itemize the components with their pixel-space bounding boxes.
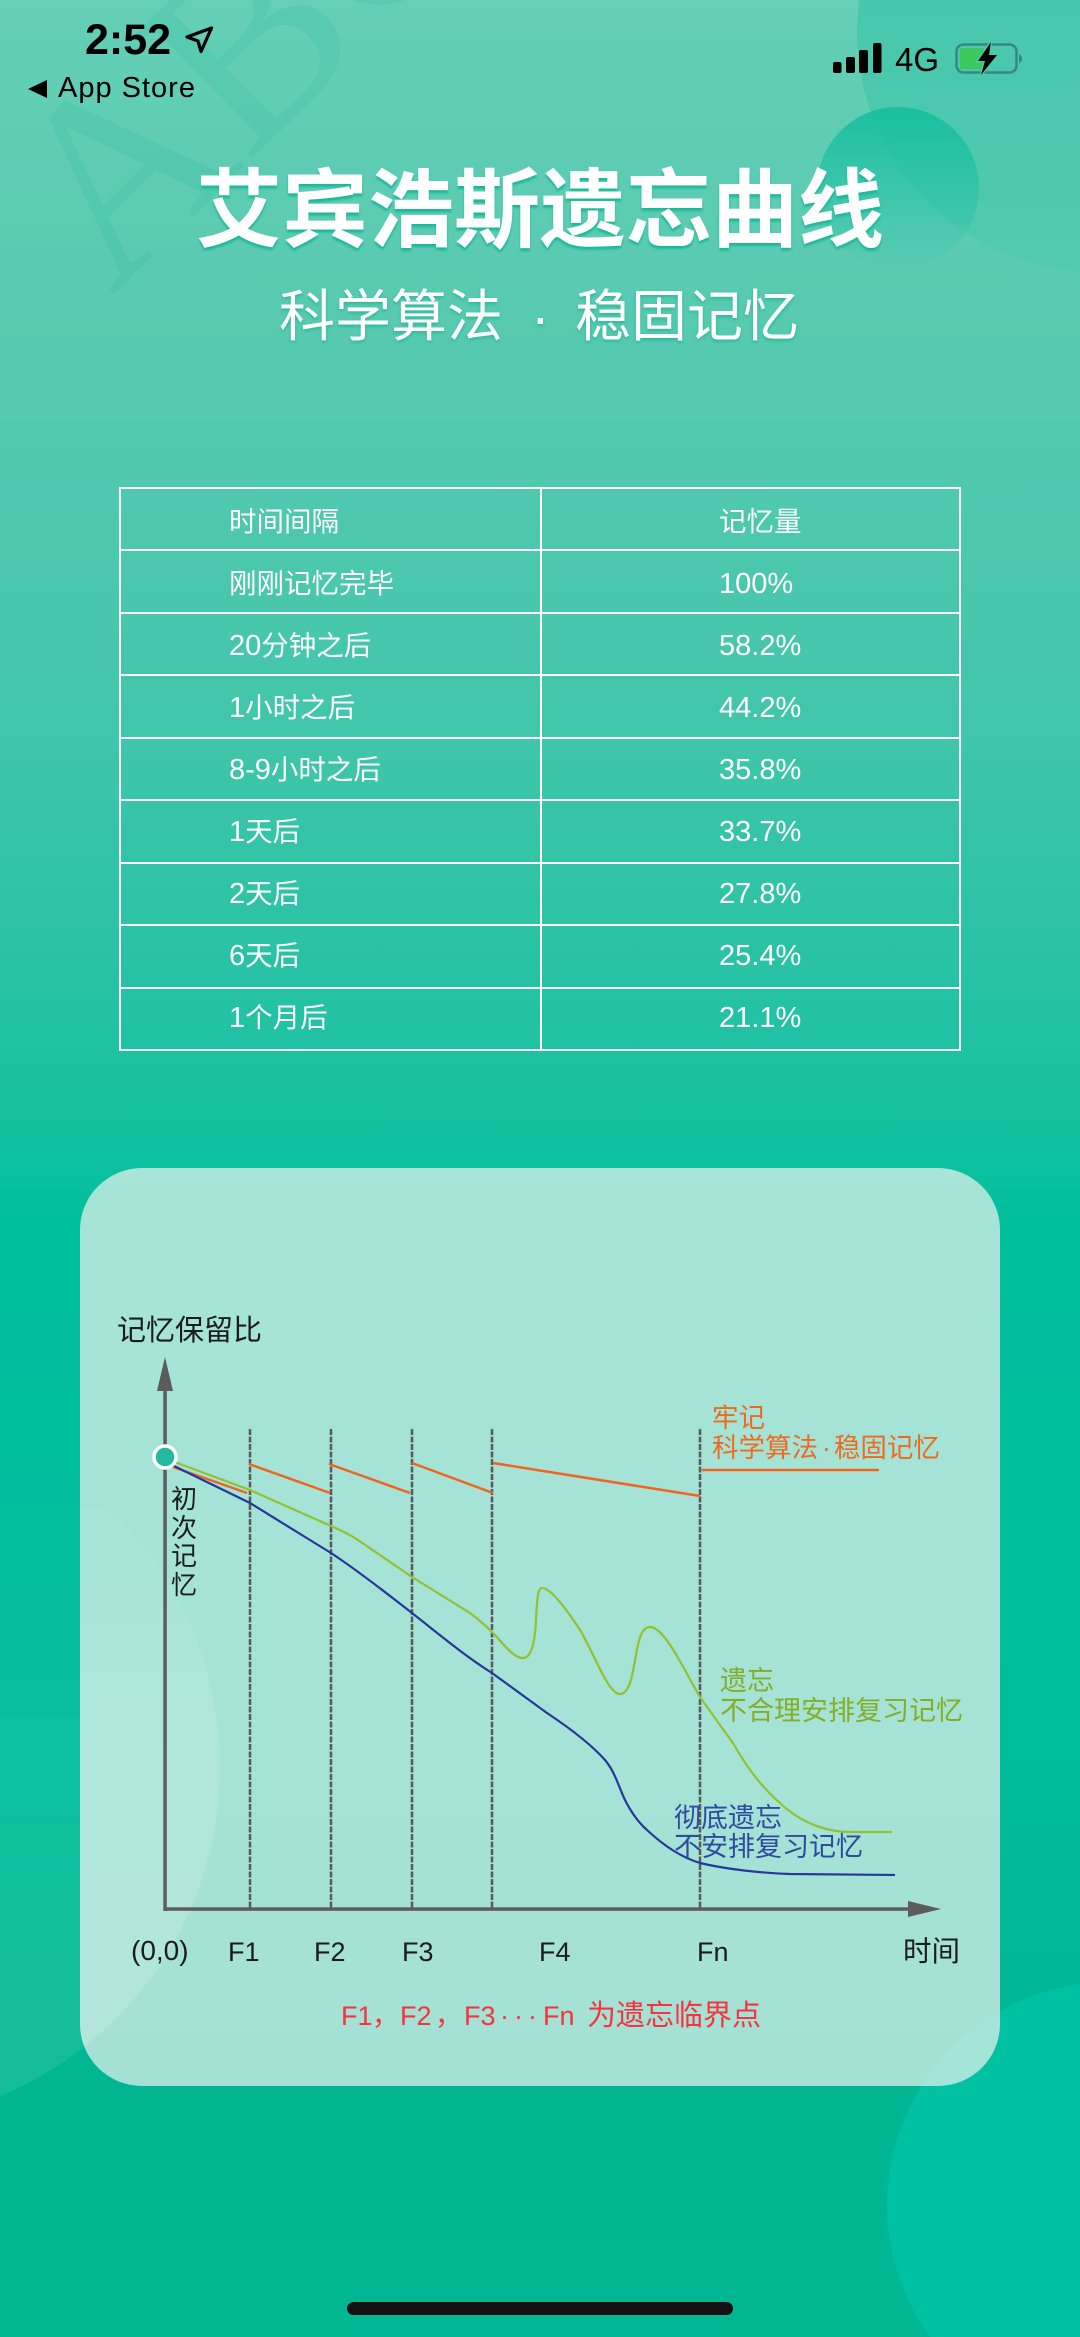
critical points note: F3 — [464, 2001, 496, 2031]
status bar: time: 2:52 — [85, 16, 171, 64]
critical point lines — [250, 1429, 700, 1909]
icon: signal bars — [833, 43, 882, 73]
icon: location arrow — [185, 26, 214, 54]
critical points note: ··· — [500, 2001, 542, 2031]
complete forgetting label — [674, 1803, 863, 1862]
critical points note: F2 — [400, 2001, 432, 2031]
initial memory label — [171, 1484, 197, 1600]
row 6 time: 2天后 — [229, 878, 300, 910]
x axis labels: (0,0) — [131, 1935, 189, 1966]
icon: charging battery — [955, 42, 1022, 75]
firm memory label: 牢记 — [712, 1403, 765, 1433]
table header: time interval: 时间间隔 — [229, 506, 339, 537]
row 4 time: 8-9小时之后 — [229, 754, 381, 786]
orange curve: firm memory — [173, 1463, 879, 1496]
critical points note: Fn — [543, 2001, 575, 2031]
blue curve: no review — [172, 1465, 895, 1875]
subtitle: 稳固记忆 — [575, 285, 799, 348]
initial memory label: 忆 — [171, 1570, 197, 1600]
x axis labels: F4 — [539, 1937, 571, 1967]
row 1 value: 100% — [719, 568, 793, 600]
firm memory label: 科学算法·稳固记忆 — [712, 1433, 940, 1463]
subtitle — [279, 285, 799, 348]
row 1 time: 刚刚记忆完毕 — [229, 568, 394, 599]
complete forgetting label: 彻底遗忘 — [674, 1803, 782, 1833]
table header: memory amount: 记忆量 — [719, 506, 802, 537]
critical points note: F1 — [341, 2001, 373, 2031]
firm memory label — [712, 1403, 940, 1463]
critical points note: ， — [435, 2001, 462, 2031]
forget label: 遗忘 — [720, 1666, 774, 1696]
row 6 value: 27.8% — [719, 878, 801, 910]
initial memory label: 记 — [171, 1541, 197, 1571]
row 7 value: 25.4% — [719, 940, 801, 972]
status bar: back to App Store: App Store — [58, 72, 196, 104]
row 3 value: 44.2% — [719, 692, 801, 724]
start point marker — [154, 1446, 176, 1468]
x axis arrow — [164, 1901, 941, 1917]
panel: retention table — [119, 487, 961, 1051]
critical points note: ， — [372, 2001, 399, 2031]
subtitle: · — [531, 285, 550, 348]
panel: forgetting curve card — [80, 1168, 1000, 2086]
initial memory label: 次 — [171, 1513, 197, 1543]
row 2 time: 20分钟之后 — [229, 630, 371, 662]
status bar: network type: 4G — [895, 41, 939, 78]
x axis labels: F1 — [228, 1937, 260, 1967]
row 8 time: 1个月后 — [229, 1002, 328, 1034]
row 2 value: 58.2% — [719, 630, 801, 662]
x axis labels — [131, 1935, 960, 1968]
x axis labels: F3 — [402, 1937, 434, 1967]
complete forgetting label: 不安排复习记忆 — [674, 1832, 863, 1862]
row 4 value: 35.8% — [719, 754, 801, 786]
critical points note: 为遗忘临界点 — [587, 1999, 761, 2032]
green curve: forgetting with poor review — [172, 1461, 892, 1832]
row 7 time: 6天后 — [229, 940, 300, 972]
row 5 value: 33.7% — [719, 816, 801, 848]
y axis arrow — [157, 1357, 173, 1911]
row 3 time: 1小时之后 — [229, 692, 355, 724]
initial memory label: 初 — [171, 1484, 197, 1514]
x axis labels: F2 — [314, 1937, 346, 1967]
forget label: 不合理安排复习记忆 — [720, 1696, 963, 1726]
y axis title: 记忆保留比 — [117, 1314, 262, 1347]
x axis labels: Fn — [697, 1937, 729, 1967]
row 8 value: 21.1% — [719, 1002, 801, 1034]
row 5 time: 1天后 — [229, 816, 300, 848]
forget label — [720, 1666, 963, 1726]
title: 艾宾浩斯遗忘曲线 — [196, 163, 884, 259]
x axis labels: 时间 — [903, 1936, 960, 1968]
subtitle: 科学算法 — [279, 285, 503, 348]
home indicator — [347, 2302, 733, 2315]
